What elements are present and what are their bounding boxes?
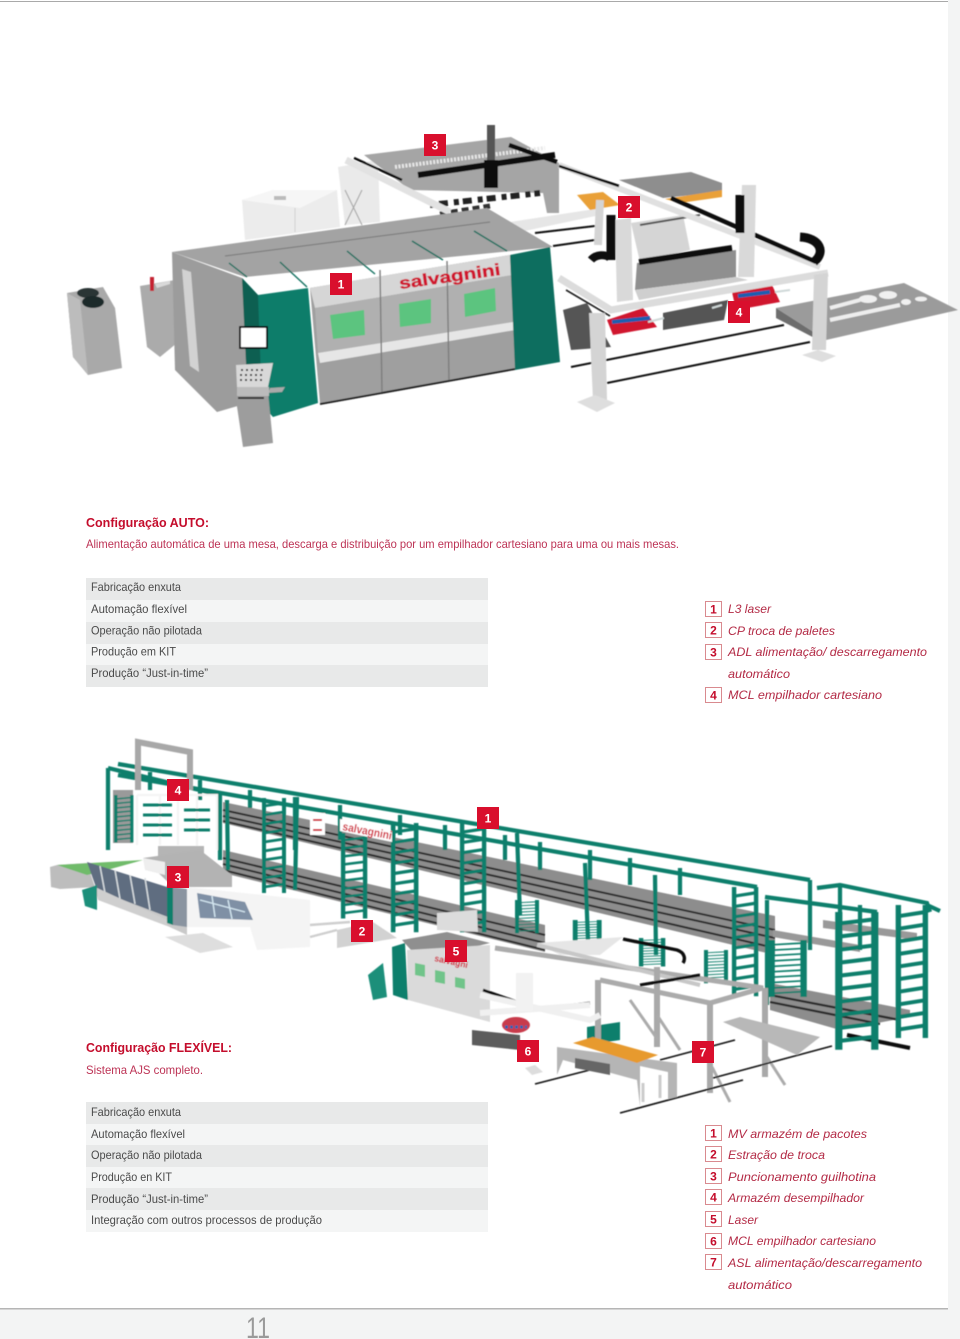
- legend: AUTO: 4: [710, 688, 717, 702]
- table: AUTO benefits: Automação flexível: [91, 602, 187, 616]
- table: AUTO benefits: [86, 578, 488, 687]
- icon: control console: [235, 363, 285, 447]
- punching and shearing machine: [50, 850, 350, 953]
- icon: white electrical cabinets: [242, 190, 340, 240]
- illustration: FLEXIBLE system: [50, 742, 940, 1113]
- heading: Configuração AUTO: Configuração AUTO:: [86, 516, 209, 530]
- teal rack rails: [108, 764, 940, 1005]
- sheet storage shelves: [113, 790, 917, 1048]
- legend: FLEXÍVEL: Armazém desempilhador: [727, 1191, 865, 1205]
- legend: FLEXÍVEL: [706, 1126, 922, 1292]
- legend: FLEXÍVEL: MCL empilhador cartesiano: [728, 1234, 876, 1248]
- laser machine L3: [172, 208, 560, 417]
- legend: FLEXÍVEL: 5: [710, 1212, 717, 1226]
- icon: monitor: [240, 327, 267, 348]
- gantry: long beam and central block: [559, 165, 820, 300]
- number badges: AUTO: 2: [626, 200, 633, 214]
- floor rails: [535, 1040, 832, 1113]
- salvagnini sign: [310, 813, 393, 842]
- legend: AUTO: automático: [728, 667, 790, 681]
- base pad: [525, 1065, 543, 1075]
- floor rails: [571, 325, 810, 383]
- number badges: AUTO: 4: [736, 306, 743, 320]
- legend: AUTO: ADL alimentação/ descarregamento: [727, 645, 927, 659]
- table: FLEXÍVEL benefits: [86, 1102, 488, 1232]
- table: FLEXÍVEL benefits: Produção “Just-in-time”: [91, 1192, 208, 1206]
- description: FLEXÍVEL: Sistema AJS completo.: [86, 1063, 203, 1077]
- table: AUTO benefits: Produção em KIT: [91, 644, 177, 658]
- table: FLEXÍVEL benefits: Fabricação enxuta: [91, 1105, 181, 1119]
- table: AUTO benefits: Fabricação enxuta: [91, 580, 181, 594]
- legend: AUTO: MCL empilhador cartesiano: [728, 688, 882, 702]
- number badges: FLEXÍVEL: 3: [175, 870, 182, 884]
- legend: FLEXÍVEL: ASL alimentação/descarregamento: [727, 1256, 922, 1270]
- table: AUTO benefits: Produção “Just-in-time”: [91, 666, 208, 680]
- rear loading frame: [338, 125, 559, 225]
- dark shuttle tables: [563, 285, 790, 350]
- heading: Configuração FLEXÍVEL: Configuração FLEXÍVEL:: [86, 1040, 232, 1055]
- number badges: FLEXÍVEL: 7: [700, 1046, 707, 1060]
- number badges: FLEXÍVEL: 4: [175, 784, 182, 798]
- sheet output table: [776, 283, 958, 344]
- legend: AUTO: 3: [710, 646, 717, 660]
- logo: salvagnini: [398, 261, 502, 293]
- number badges: FLEXÍVEL: [167, 779, 714, 1063]
- number badges: FLEXÍVEL: 6: [525, 1044, 532, 1058]
- mid level platform and pallet: [510, 172, 722, 262]
- legend: FLEXÍVEL: 2: [710, 1148, 717, 1162]
- legend: AUTO: [706, 602, 927, 702]
- legend: FLEXÍVEL: MV armazém de pacotes: [728, 1127, 867, 1141]
- table: FLEXÍVEL benefits: Integração com outros processos de produção: [91, 1213, 322, 1227]
- laser unit: [368, 910, 490, 1022]
- legend: FLEXÍVEL: Estração de troca: [728, 1148, 825, 1162]
- legend: FLEXÍVEL: 3: [710, 1170, 717, 1184]
- legend: FLEXÍVEL: Puncionamento guilhotina: [728, 1170, 876, 1184]
- gantry: front frame and legs: [559, 273, 836, 412]
- legend: FLEXÍVEL: 4: [710, 1190, 717, 1204]
- legend: FLEXÍVEL: 1: [710, 1126, 717, 1140]
- teal rack ladders: [116, 795, 925, 1050]
- number badges: AUTO: 1: [338, 278, 345, 292]
- table: FLEXÍVEL benefits: Operação não pilotada: [91, 1148, 202, 1162]
- number badges: FLEXÍVEL: 2: [359, 924, 366, 938]
- number badges: FLEXÍVEL: 5: [453, 944, 460, 958]
- conveyor with orange pallet: [557, 1037, 677, 1107]
- second gantry with robot: [472, 937, 785, 1102]
- table: AUTO benefits: Operação não pilotada: [91, 624, 202, 638]
- icon: tank unit: [140, 277, 177, 357]
- gantry columns: [611, 185, 756, 302]
- legend: AUTO: L3 laser: [728, 602, 772, 616]
- legend: FLEXÍVEL: Laser: [728, 1213, 759, 1227]
- destacker portal: [137, 742, 217, 856]
- table: FLEXÍVEL benefits: Automação flexível: [91, 1127, 185, 1141]
- illustration: AUTO configuration machine: [67, 125, 958, 447]
- legend: FLEXÍVEL: 7: [710, 1256, 717, 1270]
- legend: AUTO: 2: [710, 624, 717, 638]
- number badges: FLEXÍVEL: 1: [485, 812, 492, 826]
- legend: AUTO: CP troca de paletes: [728, 624, 835, 638]
- roller table: [723, 1017, 820, 1055]
- table: FLEXÍVEL benefits: Produção en KIT: [91, 1170, 173, 1184]
- laser unit: salvagni: [434, 953, 469, 970]
- legend: AUTO: 1: [710, 602, 717, 616]
- icon: chiller unit: [67, 287, 122, 375]
- legend: FLEXÍVEL: automático: [728, 1278, 792, 1292]
- exchange table: [337, 922, 397, 948]
- salvagnini sign: salvagnini: [341, 821, 393, 842]
- description: AUTO: Alimentação automática de uma mesa, descarga e distribuição por um empilhador cartesiano para uma ou mais mesas.: [86, 537, 679, 551]
- footer band: [0, 1308, 960, 1339]
- number badges: AUTO: [330, 134, 750, 323]
- legend: FLEXÍVEL: 6: [710, 1234, 717, 1248]
- number badges: AUTO: 3: [432, 138, 439, 152]
